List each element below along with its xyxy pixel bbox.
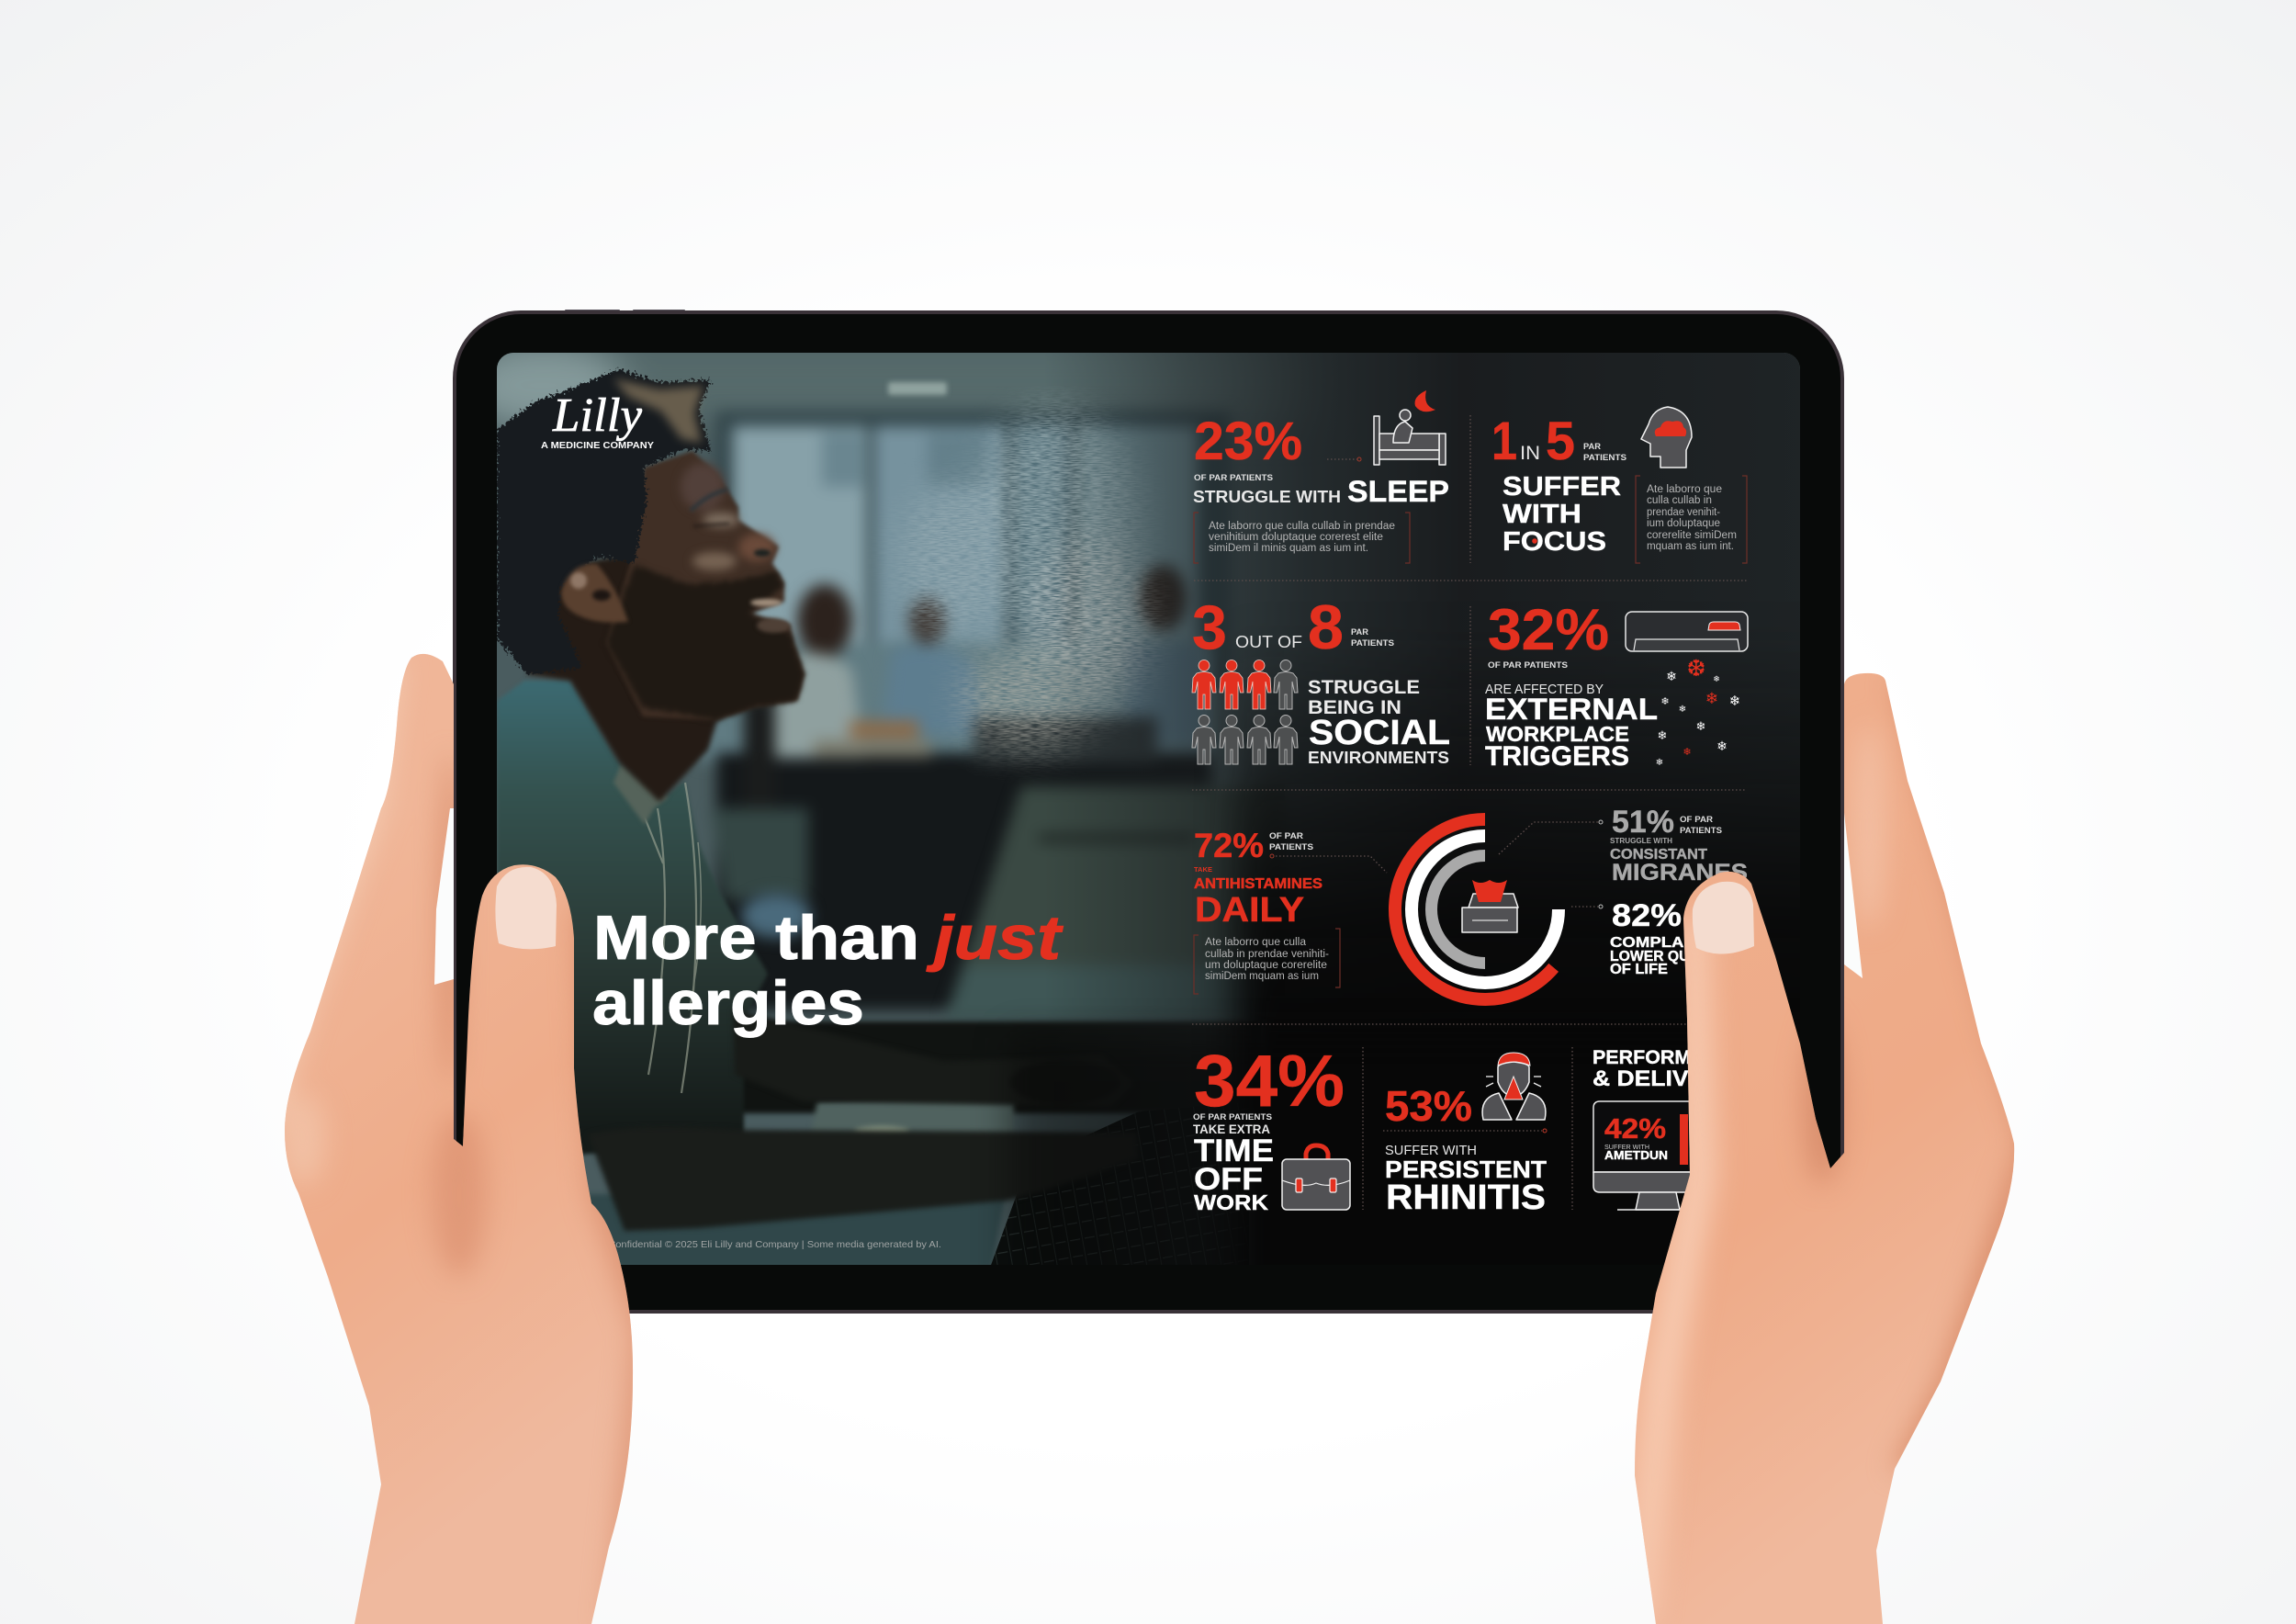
caption: PAR xyxy=(1351,627,1368,637)
body text: Ate laborro que xyxy=(1647,484,1722,495)
bracket xyxy=(1636,476,1747,563)
caption: OF PAR xyxy=(1269,831,1303,841)
caption xyxy=(1269,831,1313,852)
foreground desk xyxy=(551,1021,1258,1268)
heading: lower quality of life: COMPLAIN OF xyxy=(1610,935,1729,951)
title xyxy=(592,903,1064,1038)
body text: um doluptaque corerelite xyxy=(1205,960,1327,971)
heading: persistent rhinitis: RHINITIS xyxy=(1386,1179,1546,1217)
heading: take extra time off work xyxy=(1193,1122,1274,1214)
caption: OF PAR PATIENTS xyxy=(1488,660,1568,671)
caption: PATIENTS xyxy=(1680,826,1722,836)
body text: simiDem mquam as ium xyxy=(1205,971,1319,982)
heading: performance and delivery: PERFORMANCE xyxy=(1593,1047,1747,1068)
stat: 1 in 5 xyxy=(1491,412,1575,471)
tablet body xyxy=(455,310,1842,1312)
heading: lower quality of life xyxy=(1610,935,1731,977)
stat: 1 in 5: IN xyxy=(1520,443,1540,464)
heading: take antihistamines daily: DAILY xyxy=(1195,891,1304,930)
hand shading xyxy=(1626,680,2048,1624)
stat: 51%: 51% xyxy=(1612,805,1674,840)
caption: OF PAR PATIENTS xyxy=(1193,1112,1272,1122)
heading: lower quality of life: OF LIFE xyxy=(1610,962,1668,977)
heading: take extra time off work: TIME xyxy=(1194,1133,1274,1168)
icon: snowflakes: ❄ xyxy=(1666,670,1677,684)
heading: external workplace triggers: WORKPLACE xyxy=(1486,722,1629,746)
heading: struggle being in social environments: ENVIRONMENTS xyxy=(1308,749,1449,767)
icon: people pictogram xyxy=(1192,660,1298,764)
icon: snowflakes: ❄ xyxy=(1696,720,1705,734)
stat: 1 in 5: 5 xyxy=(1546,412,1575,471)
hair xyxy=(497,369,711,674)
right hand xyxy=(1626,673,2048,1624)
caption: suffer with ametdun: SUFFER WITH xyxy=(1604,1145,1649,1151)
connector xyxy=(1327,457,1361,461)
heading: suffer with focus: SUFFER xyxy=(1503,472,1621,502)
heading: struggle being in social environments xyxy=(1308,677,1450,767)
left hand xyxy=(257,654,661,1624)
panel: migraines and quality of life xyxy=(1499,805,1748,977)
body text xyxy=(1209,521,1395,554)
heading: take extra time off work: OFF xyxy=(1194,1162,1263,1197)
icon: snowflakes xyxy=(1656,655,1740,768)
footer note: Lilly Confidential © 2025 Eli Lilly and Company | Some media generated by AI. xyxy=(588,1239,941,1250)
stat: 42%: 42% xyxy=(1604,1112,1666,1145)
icon: snowflakes: ❄ xyxy=(1679,705,1686,715)
connectors xyxy=(1499,820,1603,908)
stat: 72%: 72% xyxy=(1194,827,1264,864)
stat: 1 in 5: 1 xyxy=(1491,412,1517,471)
heading: consistant migranes: CONSISTANT xyxy=(1610,847,1708,863)
caption: PAR xyxy=(1583,442,1601,452)
caption: OF PAR xyxy=(1680,815,1713,825)
stat: 53%: 53% xyxy=(1385,1082,1472,1130)
connector xyxy=(1383,1129,1547,1133)
icon: head with cloud xyxy=(1641,407,1692,468)
blurred colleagues xyxy=(712,565,1212,1010)
title: More than xyxy=(593,903,919,973)
logo xyxy=(541,389,654,451)
heading: struggle being in social environments: SOCIAL xyxy=(1309,714,1450,752)
panel: performance xyxy=(1593,1047,1747,1210)
bracket xyxy=(1194,929,1340,994)
thumb nail xyxy=(495,867,557,949)
face highlights xyxy=(681,463,775,570)
keyboard xyxy=(991,1111,1236,1265)
stat: 34%: 34% xyxy=(1194,1040,1345,1122)
heading: consistant migranes: MIGRANES xyxy=(1612,860,1748,885)
logo: Lilly xyxy=(552,389,643,442)
panel: rhinitis xyxy=(1383,1053,1547,1217)
heading: struggle being in social environments: STRUGGLE xyxy=(1308,677,1420,698)
icon: moon xyxy=(1414,390,1435,412)
heading: consistant migranes: STRUGGLE WITH xyxy=(1610,837,1672,845)
caption xyxy=(1583,442,1626,463)
stat: 3 out of 8: 3 xyxy=(1192,592,1227,662)
heading: suffer with focus xyxy=(1503,472,1621,557)
heading: suffer with focus: FOCUS xyxy=(1503,527,1606,557)
icon: snowflakes: ❄ xyxy=(1660,695,1670,707)
hair highlight xyxy=(613,378,703,443)
caption: suffer with ametdun: AMETDUN xyxy=(1604,1148,1668,1162)
icon: briefcase xyxy=(1282,1145,1350,1210)
body text: ium doluptaque xyxy=(1647,518,1720,529)
heading: lower quality of life: LOWER QUALITY xyxy=(1610,949,1731,964)
chart: bars xyxy=(1680,1114,1712,1165)
body text: mquam as ium int. xyxy=(1647,541,1734,552)
icon: snowflakes: ❆ xyxy=(1687,655,1705,682)
body text: cullab in prendae venihiti- xyxy=(1205,949,1329,960)
stat: 3 out of 8: OUT OF xyxy=(1235,633,1302,651)
bracket xyxy=(1194,513,1410,563)
body text xyxy=(1647,484,1737,552)
panel: triggers xyxy=(1485,598,1748,772)
body text: Ate laborro que culla xyxy=(1205,937,1307,948)
gap between fingers, right xyxy=(1844,813,1863,978)
gap between fingers, left xyxy=(434,808,454,985)
logo: A MEDICINE COMPANY xyxy=(541,440,654,451)
panel: focus xyxy=(1491,407,1747,563)
body text: prendae venihit- xyxy=(1647,507,1720,518)
body text: corerelite simiDem xyxy=(1647,530,1737,541)
caption: PATIENTS xyxy=(1583,453,1626,463)
panel: social xyxy=(1192,592,1450,767)
icon: snowflakes: ❄ xyxy=(1683,746,1692,758)
heading: take antihistamines daily xyxy=(1194,865,1322,930)
ceiling xyxy=(497,353,1180,443)
icon: tissue box xyxy=(1462,880,1518,932)
title: allergies xyxy=(592,968,864,1038)
stat: 32%: 32% xyxy=(1488,598,1609,662)
heading: take extra time off work: WORK xyxy=(1194,1190,1268,1214)
panel: time off work xyxy=(1193,1040,1350,1214)
heading: take antihistamines daily: TAKE xyxy=(1194,865,1212,874)
stat: 3 out of 8: 8 xyxy=(1308,592,1344,662)
chart: concentric ring gauge xyxy=(1395,819,1559,999)
icon: person blowing nose xyxy=(1482,1053,1546,1120)
icon: monitor xyxy=(1593,1101,1722,1210)
heading: suffer with focus: WITH xyxy=(1503,500,1581,529)
man's shirt xyxy=(497,681,768,1157)
caption xyxy=(1351,627,1394,648)
man's face xyxy=(606,451,805,720)
office windows xyxy=(698,412,1231,762)
heading: external workplace triggers: ARE AFFECTED BY xyxy=(1485,682,1604,697)
thumb nail xyxy=(1693,882,1754,954)
man's neck and back of head xyxy=(527,551,717,802)
icon: snowflakes: ❄ xyxy=(1729,693,1740,709)
heading: persistent rhinitis: SUFFER WITH xyxy=(1385,1143,1477,1158)
icon: snowflakes: ❄ xyxy=(1716,739,1728,754)
ceiling lamp xyxy=(888,382,947,395)
shirt stripes xyxy=(645,783,702,1093)
stat: 3 out of 8 xyxy=(1192,592,1344,662)
heading: external workplace triggers: TRIGGERS xyxy=(1485,741,1629,772)
body text: venihitium doluptaque corerest elite xyxy=(1209,532,1383,543)
icon: snowflakes: ❄ xyxy=(1713,675,1720,684)
heading: take extra time off work: TAKE EXTRA xyxy=(1193,1122,1270,1136)
lips xyxy=(750,599,790,633)
heading: persistent rhinitis xyxy=(1385,1143,1547,1217)
icon: snowflakes: ❄ xyxy=(1658,729,1667,743)
man's arms xyxy=(588,1009,1139,1231)
monitor on the desk xyxy=(741,786,1286,1021)
brow, eye and nostril xyxy=(691,490,771,557)
heading: external workplace triggers: EXTERNAL xyxy=(1485,693,1658,726)
heading: struggle with sleep: SLEEP xyxy=(1347,475,1449,508)
stat: 23%: 23% xyxy=(1194,412,1302,471)
dark panel overlays xyxy=(497,353,1800,1265)
panel: antihistamines xyxy=(1194,827,1387,994)
title: just xyxy=(926,903,1064,973)
body text: culla cullab in xyxy=(1647,495,1712,506)
caption xyxy=(1680,815,1722,836)
heading: struggle with sleep: STRUGGLE WITH xyxy=(1193,488,1341,506)
caption: OF PAR PATIENTS xyxy=(1194,473,1273,483)
t-shirt collar xyxy=(613,764,669,825)
caption: PATIENTS xyxy=(1351,638,1394,648)
heading: persistent rhinitis: PERSISTENT xyxy=(1385,1156,1547,1183)
heading: take antihistamines daily: ANTIHISTAMINES xyxy=(1194,876,1322,892)
connector xyxy=(1270,854,1387,873)
caption: PATIENTS xyxy=(1269,842,1313,852)
body text: simiDem il minis quam as ium int. xyxy=(1209,543,1368,554)
heading: struggle being in social environments: BEING IN xyxy=(1308,697,1401,718)
screen photo: man sneezing in an office xyxy=(497,353,1800,1265)
hand shading xyxy=(257,661,661,1624)
beard xyxy=(606,565,805,720)
icon: air conditioner xyxy=(1626,612,1748,651)
panel: sleep xyxy=(1193,390,1449,563)
heading: performance and delivery: & DELIVERY xyxy=(1593,1066,1738,1091)
body text: Ate laborro que culla cullab in prendae xyxy=(1209,521,1395,532)
heading: external workplace triggers xyxy=(1485,682,1658,772)
heading: consistant migranes xyxy=(1610,837,1748,885)
ear xyxy=(561,564,628,623)
stat: 82%: 82% xyxy=(1612,898,1682,933)
icon: person in bed xyxy=(1374,410,1446,465)
icon: snowflakes: ❄ xyxy=(1705,690,1718,708)
heading: performance and delivery xyxy=(1593,1047,1747,1091)
heading: struggle with sleep xyxy=(1193,475,1449,508)
body text xyxy=(1205,937,1329,982)
icon: snowflakes: ❄ xyxy=(1656,758,1663,768)
sneeze particles xyxy=(900,409,1148,749)
